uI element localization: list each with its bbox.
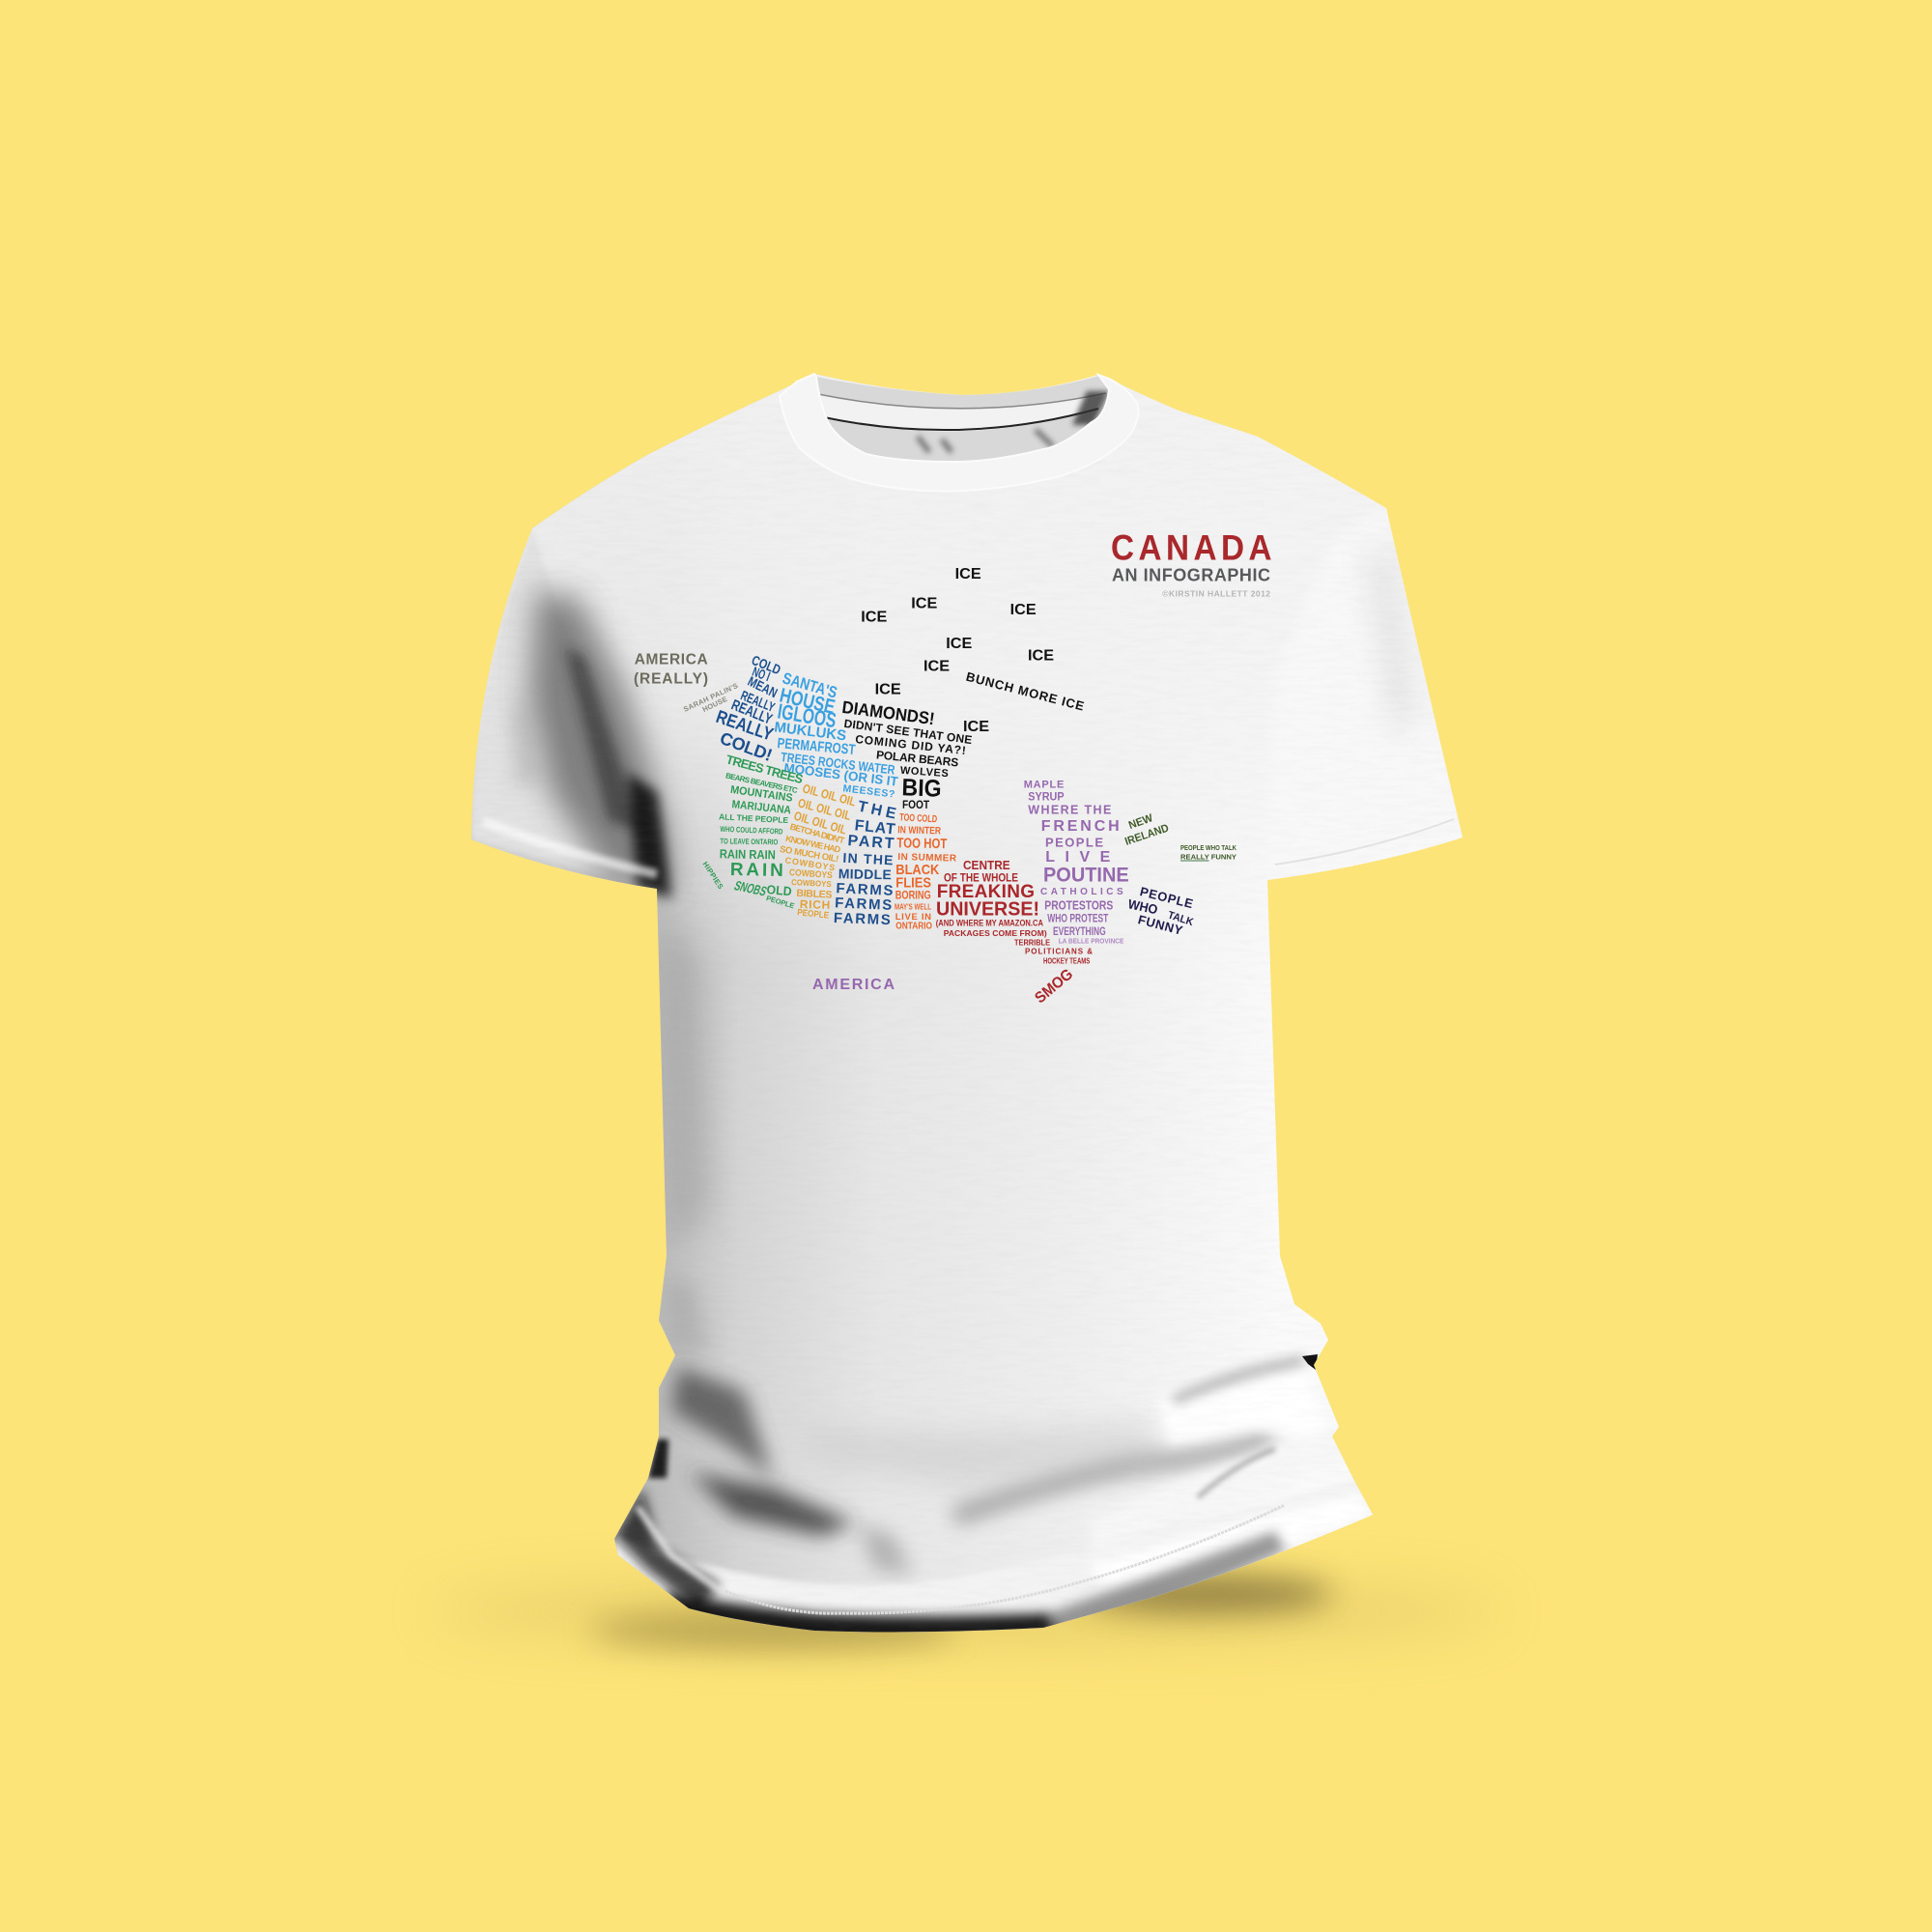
- region: arctic islands ICE: ICE: [875, 681, 901, 697]
- region: Alberta amber: KNOW WE HAD: [784, 834, 842, 855]
- region: Quebec purple: SYRUP: [1028, 791, 1065, 803]
- region: arctic islands ICE: [861, 566, 1086, 735]
- region: Ontario red: PACKAGES COME FROM): [944, 928, 1047, 938]
- region: Northwest Territories light blue: HOUSE: [778, 684, 838, 719]
- region: Ontario red: [936, 859, 1093, 1007]
- map: top title block: [1111, 528, 1271, 598]
- region: Manitoba orange: IN WINTER: [897, 824, 942, 837]
- region: British Columbia green: RAIN: [730, 860, 783, 881]
- region: Maritimes navy: [1126, 884, 1195, 938]
- region: Manitoba orange: LIVE IN: [895, 912, 931, 923]
- region: Yukon dark blue: COLD!: [718, 728, 775, 765]
- region: Manitoba orange: BORING: [895, 891, 931, 902]
- region: Quebec purple: CATHOLICS: [1040, 887, 1123, 897]
- region: Nunavut black: COMING DID YA?!: [855, 732, 967, 757]
- region: Nunavut black: FOOT: [902, 798, 930, 811]
- region: British Columbia green: RAIN RAIN: [720, 846, 776, 862]
- region: arctic islands ICE: ICE: [946, 636, 973, 652]
- region: Ontario red: OF THE WHOLE: [944, 870, 1018, 884]
- region: Manitoba orange: IN SUMMER: [897, 852, 957, 865]
- region: Saskatchewan dark blue: THE: [856, 799, 897, 823]
- neck interior: [817, 377, 1108, 461]
- region: Maritimes navy: TALK: [1166, 909, 1195, 928]
- region: Alberta amber: SO MUCH OIL!: [779, 844, 839, 865]
- region: British Columbia green: MARIJUANA: [731, 799, 791, 816]
- region: Alberta amber: BIBLES: [796, 888, 833, 901]
- region: Alberta amber: COWBOYS: [791, 877, 832, 889]
- shirt base shape: [471, 374, 1463, 1632]
- region: Saskatchewan dark blue: PART: [847, 833, 895, 852]
- region: Nunavut black: POLAR BEARS: [875, 748, 959, 769]
- region: Northwest Territories light blue: SANTA'S: [781, 669, 839, 702]
- region: Saskatchewan dark blue: MIDDLE: [838, 866, 892, 882]
- t-shirt: [464, 367, 1478, 1647]
- region: Nunavut black: WOLVES: [899, 765, 949, 780]
- region: arctic islands ICE: ICE: [963, 719, 989, 735]
- region: New Ireland: NEW: [1127, 812, 1154, 832]
- region: arctic islands ICE: BUNCH MORE ICE: [965, 669, 1086, 714]
- region: Quebec purple: WHERE THE: [1028, 804, 1111, 817]
- region: Quebec purple: LIVE: [1045, 849, 1111, 866]
- region: Northwest Territories light blue: PERMAFROST: [777, 735, 856, 758]
- label: Sarah Palin's house: HOUSE: [701, 695, 728, 714]
- label: America (really): (REALLY): [634, 671, 708, 688]
- region: arctic islands ICE: ICE: [1010, 602, 1037, 618]
- region: Nunavut black: DIAMONDS!: [840, 697, 936, 728]
- region: Northwest Territories light blue: TREES ROCKS WATER: [780, 750, 895, 778]
- region: Ontario red: CENTRE: [963, 859, 1010, 872]
- label: America bottom: AMERICA: [812, 977, 895, 993]
- region: Alberta amber: COWBOYS: [784, 855, 836, 872]
- region: Yukon dark blue: REALLY: [729, 696, 775, 728]
- region: Quebec purple: [1024, 779, 1129, 946]
- region: Quebec purple: PROTESTORS: [1044, 897, 1114, 912]
- region: Yukon dark blue: MEAN: [746, 673, 780, 700]
- region: British Columbia green: [701, 752, 805, 910]
- region: Newfoundland note: [1180, 843, 1236, 862]
- label: America (really): AMERICA: [635, 651, 708, 668]
- region: Quebec purple: EVERYTHING: [1053, 924, 1106, 938]
- region: Yukon dark blue: REALLY: [739, 687, 778, 715]
- region: arctic islands ICE: ICE: [923, 659, 950, 675]
- region: Maritimes navy: FUNNY: [1137, 912, 1184, 938]
- region: Alberta amber: COWBOYS: [788, 867, 833, 881]
- region: Ontario red: TERRIBLE: [1014, 937, 1050, 947]
- region: Quebec purple: WHO PROTEST: [1047, 912, 1109, 925]
- region: Manitoba orange: TOO HOT: [896, 836, 948, 852]
- label: America (really): [634, 651, 708, 688]
- shirt shading: [464, 367, 1478, 1647]
- region: Newfoundland note: PEOPLE WHO TALK: [1180, 843, 1236, 852]
- subtitle: AN INFOGRAPHIC: [1112, 565, 1270, 584]
- region: Northwest Territories light blue: MUKLUKS: [774, 719, 847, 744]
- region: Saskatchewan dark blue: [834, 799, 897, 928]
- region: arctic islands ICE: ICE: [861, 609, 888, 625]
- region: Yukon dark blue: [713, 652, 783, 765]
- region: Saskatchewan dark blue: FLAT: [854, 817, 896, 838]
- region: Ontario red: UNIVERSE!: [936, 898, 1039, 920]
- region: Maritimes navy: PEOPLE: [1139, 884, 1195, 911]
- region: Alberta amber: [779, 781, 858, 922]
- region: Alberta amber: OIL OIL OIL: [797, 795, 853, 823]
- region: British Columbia green: TO LEAVE ONTARIO: [720, 837, 778, 846]
- region: Saskatchewan dark blue: FARMS: [835, 895, 893, 914]
- region: Manitoba orange: MAY'S WELL: [895, 901, 931, 911]
- region: Quebec purple: LA BELLE PROVINCE: [1059, 937, 1123, 946]
- region: Ontario red: POLITICIANS &: [1025, 948, 1093, 956]
- region: arctic islands ICE: ICE: [1028, 648, 1054, 665]
- region: British Columbia green: SNOBS: [732, 878, 769, 898]
- region: Nunavut black: [840, 697, 973, 811]
- region: arctic islands ICE: ICE: [911, 595, 938, 611]
- region: Northwest Territories light blue: IGLOOS: [776, 699, 838, 732]
- region: Northwest Territories light blue: MOOSES (OR IS IT: [783, 760, 899, 789]
- region: British Columbia green: OLD: [766, 882, 792, 898]
- title: CANADA: [1111, 528, 1272, 568]
- region: Quebec purple: POUTINE: [1043, 865, 1129, 887]
- region: Manitoba orange: FLIES: [895, 874, 931, 891]
- region: British Columbia green: HIPPIES: [701, 860, 725, 891]
- region: Manitoba orange: BLACK: [895, 862, 939, 878]
- copyright: ©KIRSTIN HALLETT 2012: [1162, 588, 1270, 598]
- region: Saskatchewan dark blue: IN THE: [842, 850, 894, 867]
- region: Ontario red: FREAKING: [937, 882, 1035, 902]
- region: British Columbia green: ALL THE PEOPLE: [719, 811, 789, 825]
- region: British Columbia green: PEOPLE: [765, 894, 795, 910]
- region: arctic islands ICE: ICE: [955, 566, 981, 582]
- region: Ontario red: SMOG: [1032, 966, 1076, 1007]
- region: Alberta amber: PEOPLE: [797, 907, 830, 922]
- region: Manitoba orange: TOO COLD: [899, 811, 938, 825]
- region: Quebec purple: MAPLE: [1024, 779, 1064, 790]
- region: Alberta amber: BETCHA DIDN'T: [789, 822, 846, 845]
- region: Yukon dark blue: COLD: [750, 652, 783, 677]
- region: Ontario red: (AND WHERE MY AMAZON.CA: [936, 918, 1043, 927]
- region: Nunavut black: BIG: [901, 774, 942, 803]
- region: Northwest Territories light blue: [774, 669, 899, 801]
- region: Saskatchewan dark blue: FARMS: [834, 910, 891, 928]
- region: Manitoba orange: ONTARIO: [895, 922, 932, 932]
- region: Quebec purple: PEOPLE: [1045, 836, 1103, 850]
- region: Quebec purple: FRENCH: [1041, 818, 1120, 835]
- region: Yukon dark blue: REALLY: [713, 707, 776, 746]
- region: Alberta amber: RICH: [800, 897, 830, 912]
- region: Newfoundland note: REALLY FUNNY: [1180, 852, 1236, 861]
- region: New Ireland: IRELAND: [1123, 823, 1171, 848]
- region: Nunavut black: DIDN'T SEE THAT ONE: [843, 717, 973, 747]
- ground shadow: [425, 1575, 1507, 1650]
- region: Yukon dark blue: NO I: [751, 664, 772, 684]
- region: British Columbia green: WHO COULD AFFORD: [720, 825, 783, 837]
- region: British Columbia green: TREES TREES: [724, 752, 805, 786]
- region: Ontario red: HOCKEY TEAMS: [1043, 957, 1091, 966]
- collar ribbing: [780, 374, 1138, 491]
- label: Sarah Palin's house: SARAH PALIN'S: [682, 681, 739, 714]
- region: Northwest Territories light blue: MEESES?: [842, 782, 895, 801]
- region: Alberta amber: OIL OIL OIL: [801, 781, 858, 810]
- region: Alberta amber: OIL OIL OIL: [792, 809, 848, 838]
- region: Manitoba orange: [895, 811, 957, 932]
- region: Saskatchewan dark blue: FARMS: [836, 880, 894, 899]
- region: British Columbia green: MOUNTAINS: [729, 784, 794, 805]
- region: British Columbia green: BEARS BEAVERS ETC: [724, 771, 799, 795]
- region: Maritimes navy: WHO: [1126, 896, 1159, 917]
